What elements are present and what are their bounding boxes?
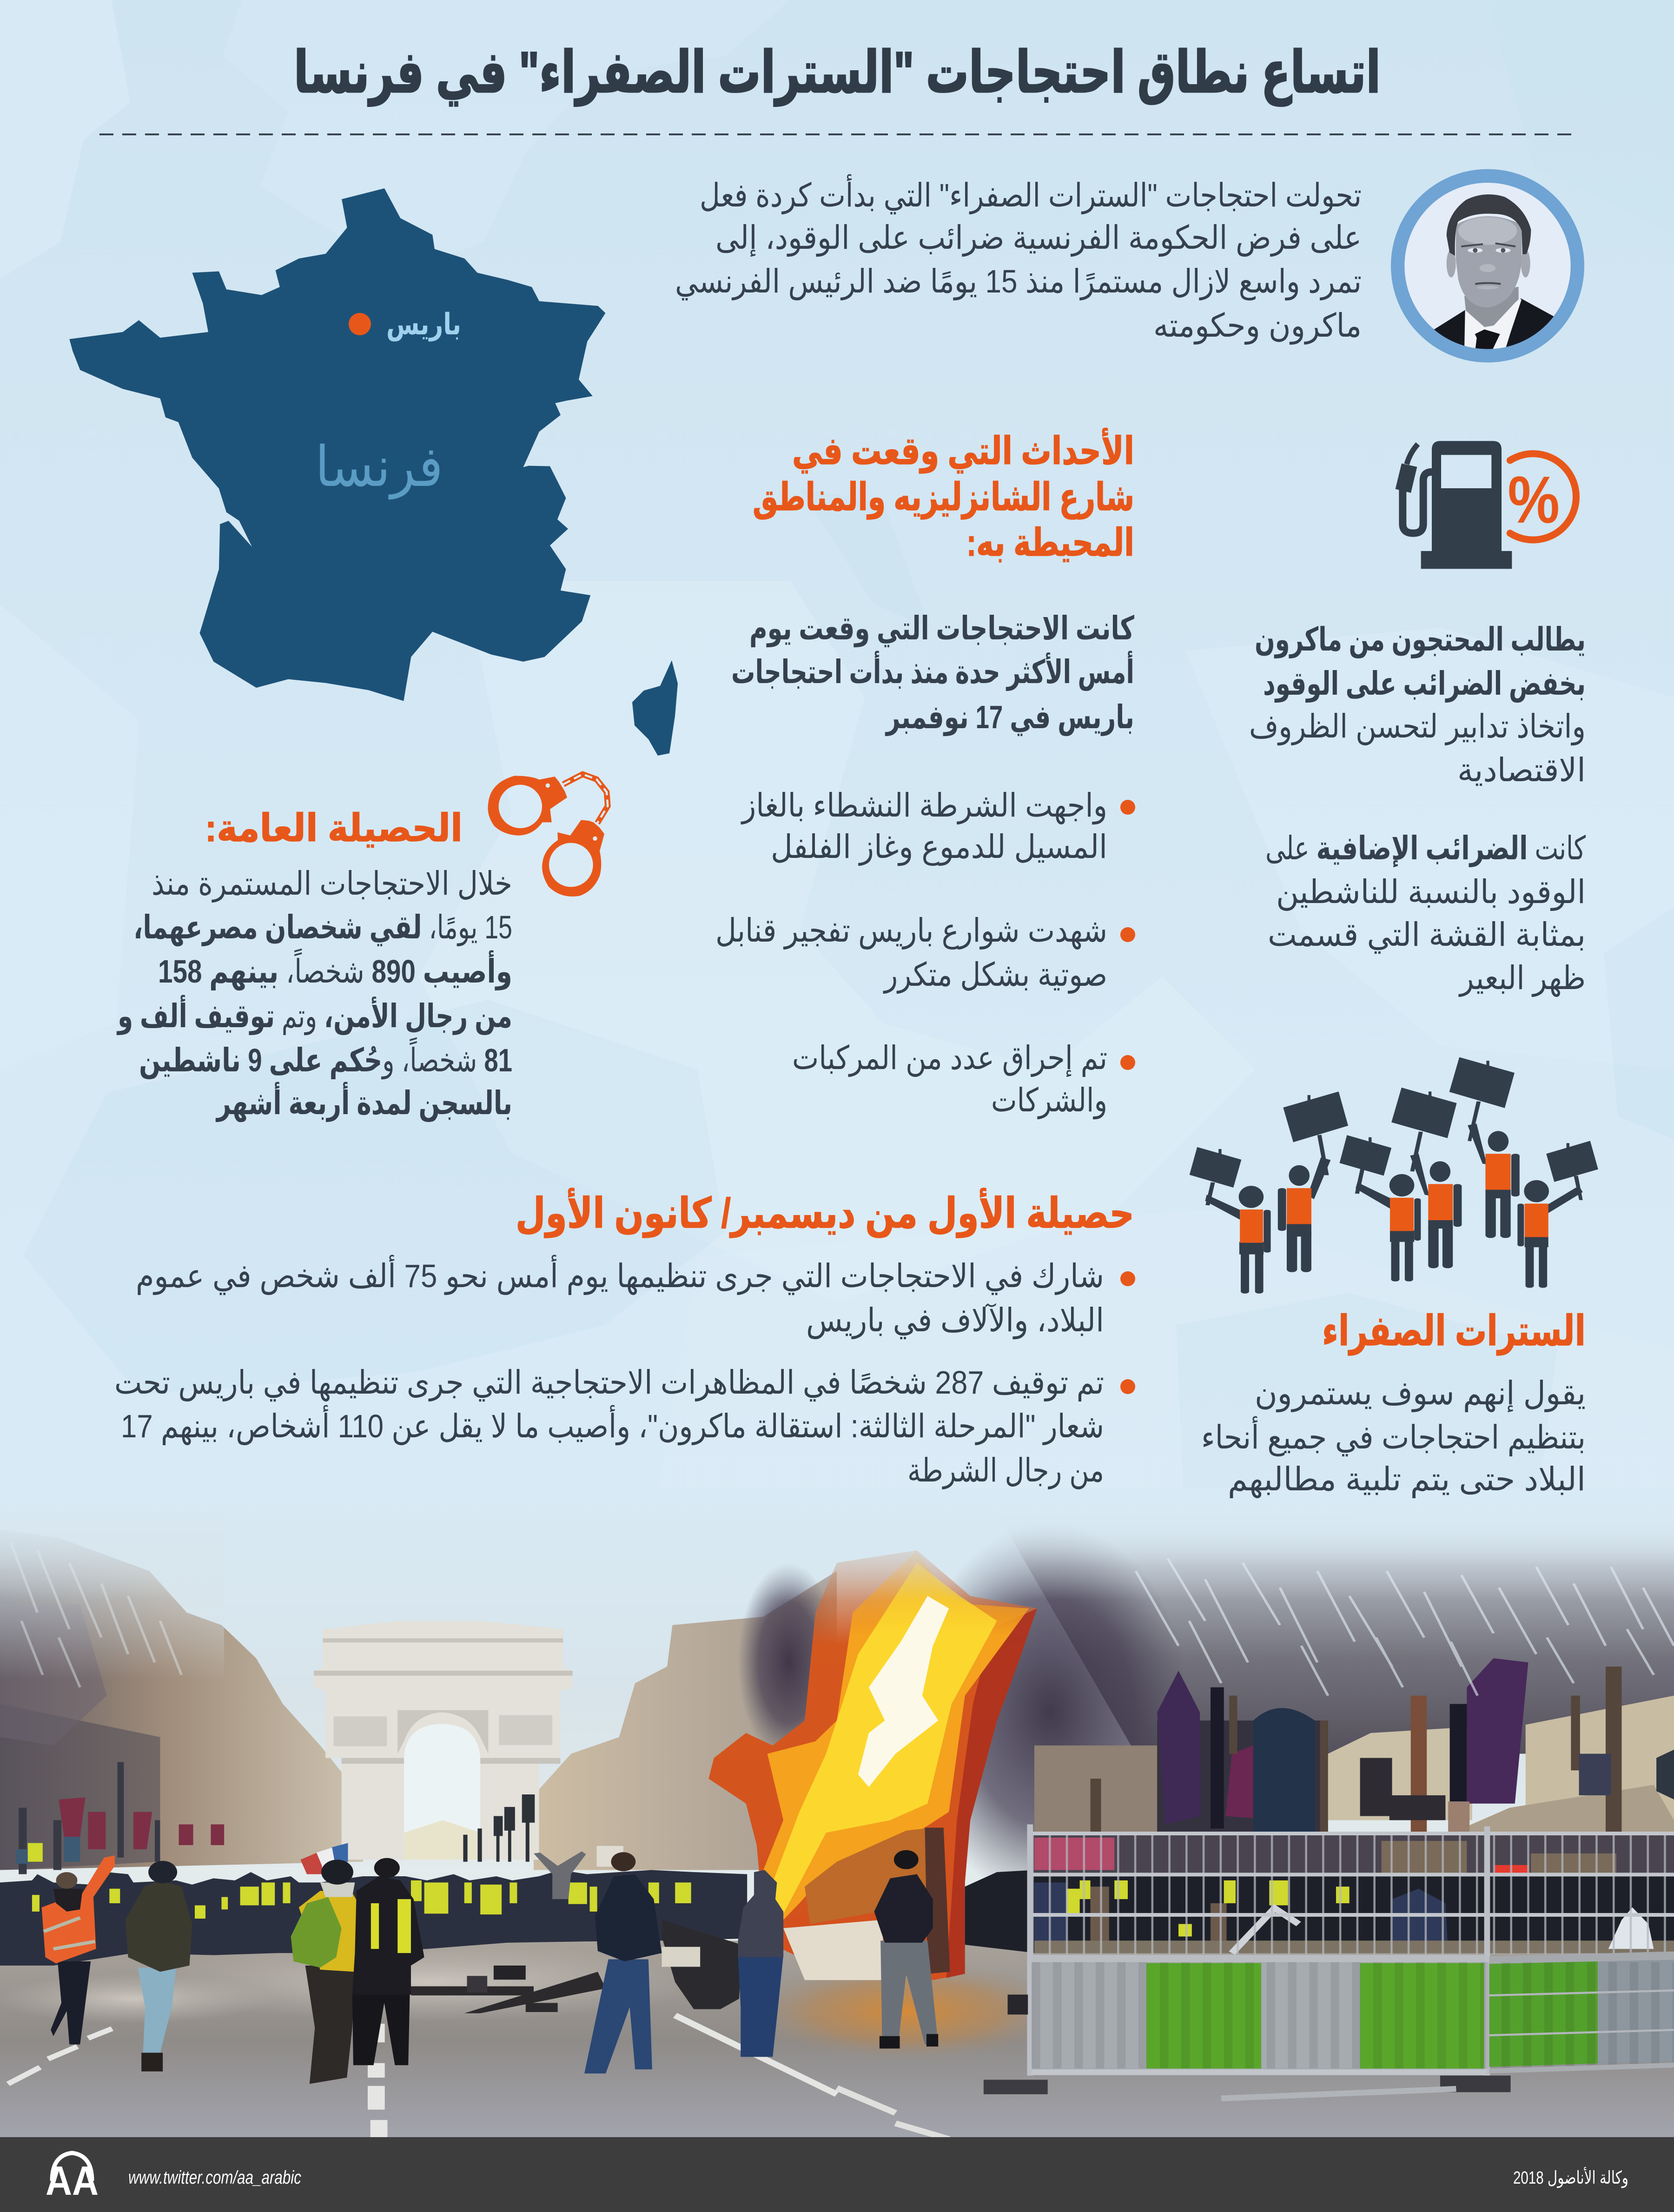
text block: demands: الاقتصادية [1457, 752, 1586, 788]
credit: وكالة الأناضول 2018 [1513, 2166, 1628, 2188]
text block: protests lead [731, 610, 1134, 736]
traffic lights [463, 1794, 535, 1862]
text block: yellow vests: البلاد حتى يتم تلبية مطالبهم [1228, 1461, 1586, 1498]
protester 3 [1340, 1135, 1421, 1282]
icon: handcuffs [488, 774, 608, 897]
bullet list: Paris events: صوتية بشكل متكرر [883, 957, 1107, 994]
protester: hooded [738, 1870, 783, 2057]
intro paragraph [675, 174, 1362, 345]
heading: events in Champs-Elysees: شارع الشانزليزيه والمناطق [753, 476, 1134, 520]
Paris marker [349, 313, 371, 335]
protester 5 [1449, 1057, 1520, 1238]
bullet list: Paris events: المسيل للدموع وغاز الفلفل [771, 829, 1107, 866]
text block: extra taxes: الوقود بالنسبة للناشطين [1276, 874, 1586, 911]
bullet list: December 1 toll: تم توقيف 287 شخصًا في المظاهرات الاحتجاجية التي جرى تنظيمها في باريس تحت [114, 1364, 1104, 1402]
text block: overall toll: 81 شخصاً، وحُكم على 9 ناشطين [139, 1037, 512, 1080]
dark smoke column [912, 1521, 1189, 1903]
text block: overall toll [117, 865, 512, 1122]
right half of the scene [708, 1513, 1674, 2139]
bullet list: Paris events: تم إحراق عدد من المركبات [792, 1040, 1107, 1077]
text block: protests lead: كانت الاحتجاجات التي وقعت يوم [749, 610, 1134, 648]
text block: extra taxes: كانت الضرائب الإضافية على [1265, 830, 1586, 868]
metal fence [984, 1824, 1674, 2099]
road [0, 1940, 1674, 2139]
label: France: فرنسا [315, 436, 443, 499]
icon: fuel pump with percent [1396, 441, 1576, 569]
bullet list: Paris events: واجهت الشرطة النشطاء بالغاز [741, 787, 1107, 825]
bullet list: December 1 toll [114, 1255, 1135, 1489]
twitter address: www.twitter.com/aa_arabic [128, 2167, 301, 2188]
text block: yellow vests: يقول إنهم سوف يستمرون [1255, 1375, 1586, 1413]
intro paragraph: تمرد واسع لازال مستمرًا منذ 15 يومًا ضد الرئيس الفرنسي [675, 263, 1362, 301]
protester 4 [1391, 1088, 1462, 1268]
bullet list: December 1 toll: شارك في الاحتجاجات التي جرى تنظيمها يوم أمس نحو 75 ألف شخص في عموم [136, 1255, 1104, 1295]
left half of the scene [0, 1513, 1674, 2139]
bullet list: December 1 toll: البلاد، والآلاف في باريس [806, 1302, 1104, 1340]
road markings, right [837, 2088, 949, 2139]
text block: overall toll: 15 يومًا، لقي شخصان مصرعهما، [133, 909, 512, 946]
label: Paris: باريس [386, 307, 461, 342]
heading: overall toll: الحصيلة العامة: [205, 807, 463, 850]
protester 6 [1517, 1141, 1598, 1288]
bullet list: December 1 toll: شعار "المرحلة الثالثة: استقالة ماكرون"، وأصيب ما لا يقل عن 110 أشخاص، بينهم 17 [121, 1405, 1104, 1446]
protester: olive jacket [126, 1861, 192, 2072]
text block: extra taxes: بمثابة القشة التي قسمت [1268, 917, 1586, 954]
portrait of Macron [1398, 176, 1577, 364]
trees, right of arch [534, 1571, 837, 1870]
bullet list: Paris events [715, 787, 1135, 1120]
heading: events in Champs-Elysees: الأحداث التي وقعت في [792, 428, 1134, 474]
Corsica [632, 660, 678, 756]
bullet list: December 1 toll: من رجال الشرطة [907, 1452, 1104, 1489]
road markings [8, 2015, 837, 2139]
text block: extra taxes [1265, 830, 1586, 997]
heading: December 1 toll: حصيلة الأول من ديسمبر/ كانون الأول [516, 1188, 1134, 1238]
burnt van [783, 1827, 950, 1980]
text block: overall toll: خلال الاحتجاجات المستمرة منذ [152, 865, 512, 903]
crowd [0, 1843, 747, 1966]
dark smoke above left trees [738, 1563, 840, 1762]
text block: yellow vests [1201, 1375, 1586, 1498]
heading: events in Champs-Elysees [753, 428, 1134, 564]
map of France [69, 188, 678, 756]
Arc de Triomphe [314, 1621, 573, 1860]
text block: protests lead: باريس في 17 نوفمبر [885, 699, 1134, 736]
intro paragraph: على فرض الحكومة الفرنسية ضرائب على الوقود، إلى [715, 219, 1362, 257]
smoke streak band [997, 1513, 1674, 1754]
bullet list: Paris events: والشركات [991, 1082, 1107, 1120]
protester: orange jacket [42, 1855, 115, 2045]
fire glow on the road [746, 1961, 1066, 2061]
text block: extra taxes: ظهر البعير [1458, 960, 1586, 997]
intro paragraph: تحولت احتجاجات "السترات الصفراء" التي بدأت كردة فعل [700, 174, 1362, 215]
icon: fuel pump with percent: % [1508, 463, 1560, 537]
heading: yellow vests: السترات الصفراء [1322, 1308, 1586, 1355]
buildings and banners [1034, 1658, 1674, 1953]
trees, left [0, 1529, 368, 1870]
protester: dark coat with vest [352, 1858, 424, 2065]
crowd behind the fence [965, 1870, 1674, 1952]
text block: protests lead: أمس الأكثر حدة منذ بدأت احتجاجات [731, 651, 1134, 691]
protester: by the fire [874, 1850, 938, 2049]
text block: overall toll: وأصيب 890 شخصاً، بينهم 158 [158, 949, 512, 990]
smoke streaks [1136, 1559, 1674, 1695]
intro paragraph: ماكرون وحكومته [1153, 307, 1362, 345]
photo: burning barricade on the Champs-Elysees [0, 1488, 1674, 2139]
debris and barricade [411, 1920, 742, 2013]
protester 1 [1190, 1147, 1271, 1294]
text block: demands: واتخاذ تدابير لتحسن الظروف [1249, 708, 1586, 746]
bullet list: Paris events: شهدت شوارع باريس تفجير قنابل [715, 912, 1107, 950]
logo: Anadolu Agency: AA [46, 2158, 99, 2204]
icon: protesters with signs [1190, 1057, 1598, 1294]
text block: demands [1249, 621, 1586, 788]
protester: backpack [291, 1860, 374, 2084]
text block: overall toll: بالسجن لمدة أربعة أشهر [216, 1082, 512, 1122]
text block: overall toll: من رجال الأمن، وتم توقيف ألف و [117, 995, 512, 1036]
flames [708, 1550, 1037, 1980]
protester: centre [584, 1852, 662, 2073]
protester 2 [1278, 1091, 1348, 1272]
heading: events in Champs-Elysees: المحيطة به: [966, 522, 1134, 564]
footer bar [0, 2137, 1674, 2212]
text block: yellow vests: بتنظيم احتجاجات في جميع أنحاء [1201, 1416, 1586, 1457]
